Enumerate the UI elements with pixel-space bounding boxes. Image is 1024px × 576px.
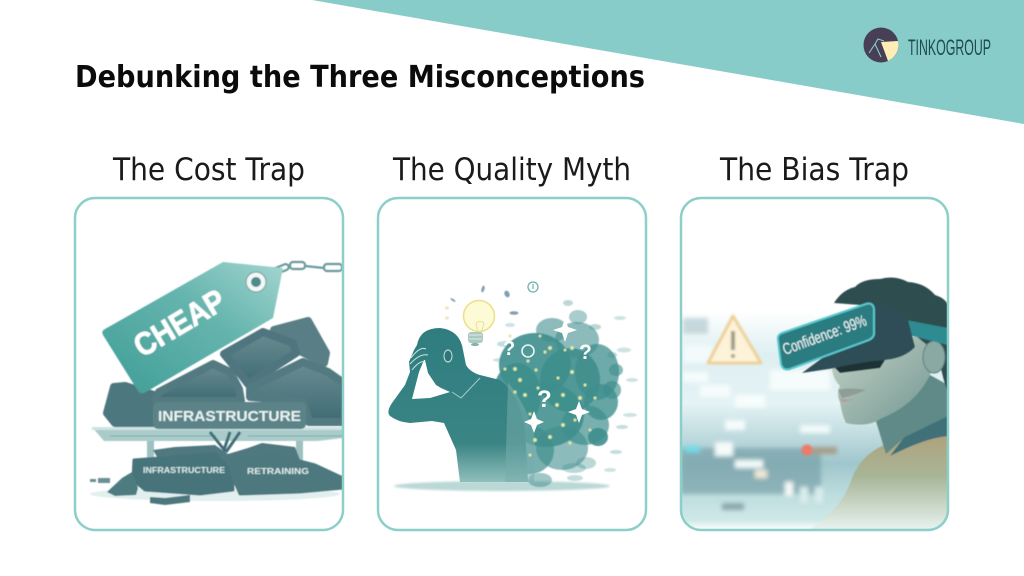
panel: bias trap: [681, 198, 950, 530]
heading: The Quality Myth: The Quality Myth: [392, 152, 631, 188]
ground shadow: [394, 481, 610, 491]
neck: [875, 375, 948, 454]
icon: warning triangle: [708, 316, 761, 363]
question marks and symbols: [503, 318, 592, 433]
price tag: cheap: CHEAP: [127, 282, 232, 364]
idea rays: [445, 285, 518, 320]
strap: [908, 320, 947, 346]
hair: [834, 278, 948, 392]
question marks and symbols: ?: [503, 338, 515, 360]
icon: light bulb: [464, 300, 494, 346]
question marks and symbols: ?: [537, 386, 552, 413]
teal corner banner: [312, 0, 1024, 124]
visor display: Confidence: 99%: [781, 313, 869, 359]
ground shadow: [90, 487, 340, 501]
hood: [810, 436, 947, 529]
icon: small clock: [528, 282, 538, 292]
rock label: infrastructure: INFRASTRUCTURE: [158, 408, 301, 425]
panel: quality myth: [378, 198, 646, 530]
bridge deck: [94, 430, 342, 442]
headset body: [802, 312, 916, 374]
rock label: infrastructure: [153, 402, 306, 429]
particle cloud: [485, 300, 638, 487]
logo: Tinkogroup: [864, 28, 991, 62]
chain: [274, 260, 342, 274]
lower rocks: [90, 443, 343, 505]
ear: [923, 341, 945, 373]
heading: The Bias Trap: The Bias Trap: [719, 152, 909, 188]
lower rocks: INFRASTRUCTURE: [143, 465, 225, 475]
face: [832, 336, 931, 426]
person with headset: [778, 278, 950, 530]
upper rocks: [107, 321, 345, 423]
title: Debunking the Three Misconceptions: [75, 60, 645, 95]
blurred city background: [682, 315, 944, 528]
person silhouette: [388, 328, 535, 482]
heading: The Cost Trap: The Cost Trap: [112, 152, 305, 188]
sparkle dots: [503, 334, 597, 457]
question marks and symbols: ?: [579, 341, 592, 364]
price tag: cheap: [102, 262, 283, 393]
panel: cost trap: [75, 198, 345, 530]
lower rocks: RETRAINING: [247, 466, 309, 476]
visor display: [778, 304, 874, 369]
